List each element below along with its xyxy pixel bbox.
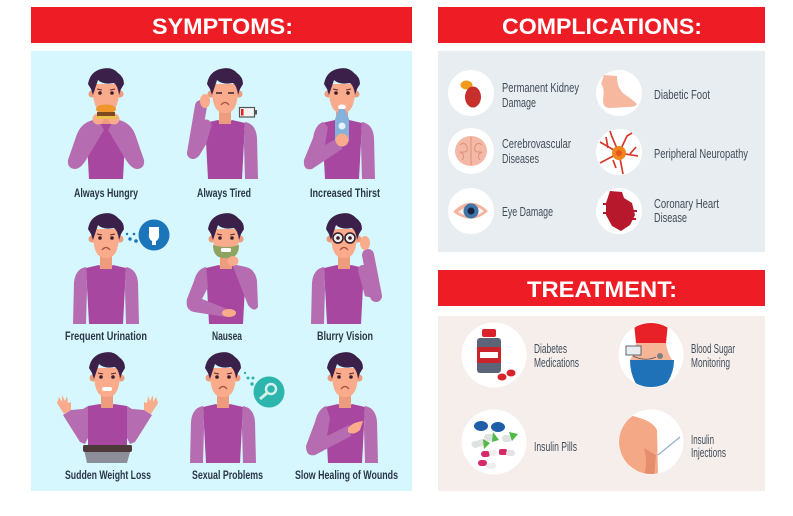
text: permanent kidney damage: Damage	[502, 95, 536, 110]
icon: blood sugar monitoring	[618, 322, 684, 388]
text: peripheral neuropathy: Peripheral Neuropathy	[654, 146, 748, 161]
label: nausea: Nausea	[212, 331, 242, 343]
text: blood sugar monitoring	[691, 342, 735, 370]
text: permanent kidney damage	[502, 80, 579, 110]
label: frequent urination: Frequent Urination	[65, 331, 147, 343]
text: insulin injections: Insulin	[691, 433, 714, 447]
complications panel background	[438, 51, 765, 252]
icon: foot	[596, 70, 642, 116]
icon: insulin pills	[462, 410, 526, 474]
text: diabetic foot: Diabetic Foot	[654, 87, 710, 102]
panel: treatment	[438, 270, 765, 491]
icon: medication bottle	[462, 322, 526, 388]
heading bar: symptoms: SYMPTOMS:	[152, 14, 293, 39]
label: sudden weight loss: Sudden Weight Loss	[65, 470, 151, 482]
text: blood sugar monitoring: Blood Sugar	[691, 342, 735, 356]
icon: insulin injection	[618, 410, 684, 476]
icon: neuron	[596, 129, 642, 175]
label: blurry vision: Blurry Vision	[317, 331, 373, 343]
heading bar: treatment: TREATMENT:	[527, 277, 677, 302]
panel: complications	[438, 7, 765, 252]
label: sexual problems: Sexual Problems	[192, 470, 263, 482]
icon: brain	[448, 128, 494, 174]
panel: symptoms	[31, 7, 412, 491]
icon: low battery	[240, 108, 257, 117]
heading bar: treatment	[438, 270, 765, 306]
icon: problem bubble	[244, 372, 284, 408]
figure: blurry vision	[311, 213, 376, 324]
label: always tired: Always Tired	[197, 188, 251, 200]
figure: slow healing of wounds	[306, 352, 378, 463]
symptoms panel background	[31, 51, 412, 491]
figure: frequent urination	[73, 213, 139, 324]
icon: eye	[448, 188, 494, 234]
text: blood sugar monitoring: Monitoring	[691, 356, 730, 370]
text: diabetes medications: Diabetes	[534, 342, 567, 356]
text: coronary heart disease	[654, 196, 719, 225]
icon: kidney	[448, 70, 494, 116]
text: insulin injections	[691, 433, 726, 460]
label: increased thirst: Increased Thirst	[310, 188, 380, 200]
text: eye damage: Eye Damage	[502, 204, 553, 219]
text: permanent kidney damage: Permanent Kidney	[502, 80, 579, 95]
icon: heart	[596, 188, 642, 234]
text: cerebrovascular diseases: Diseases	[502, 151, 539, 166]
heading bar: symptoms	[31, 7, 412, 43]
text: diabetes medications: Medications	[534, 356, 579, 370]
text: coronary heart disease: Disease	[654, 210, 687, 225]
text: cerebrovascular diseases	[502, 136, 571, 166]
text: coronary heart disease: Coronary Heart	[654, 196, 719, 211]
heading bar: complications	[438, 7, 765, 43]
text: insulin pills: Insulin Pills	[534, 440, 577, 454]
figure: nausea	[187, 213, 258, 324]
label: slow healing of wounds: Slow Healing of Wounds	[295, 470, 398, 482]
heading bar: complications: COMPLICATIONS:	[502, 14, 702, 39]
icon: toilet bubble	[126, 220, 170, 250]
figure: increased thirst	[304, 68, 375, 179]
text: cerebrovascular diseases: Cerebrovascular	[502, 136, 571, 151]
text: diabetes medications	[534, 342, 579, 370]
figure: always tired	[193, 68, 258, 179]
figure: always hungry	[68, 68, 144, 179]
label: always hungry: Always Hungry	[74, 188, 138, 200]
figure: sexual problems	[190, 352, 256, 463]
treatment panel background	[438, 316, 765, 491]
figure: sudden weight loss	[57, 352, 158, 463]
text: insulin injections: Injections	[691, 446, 726, 460]
